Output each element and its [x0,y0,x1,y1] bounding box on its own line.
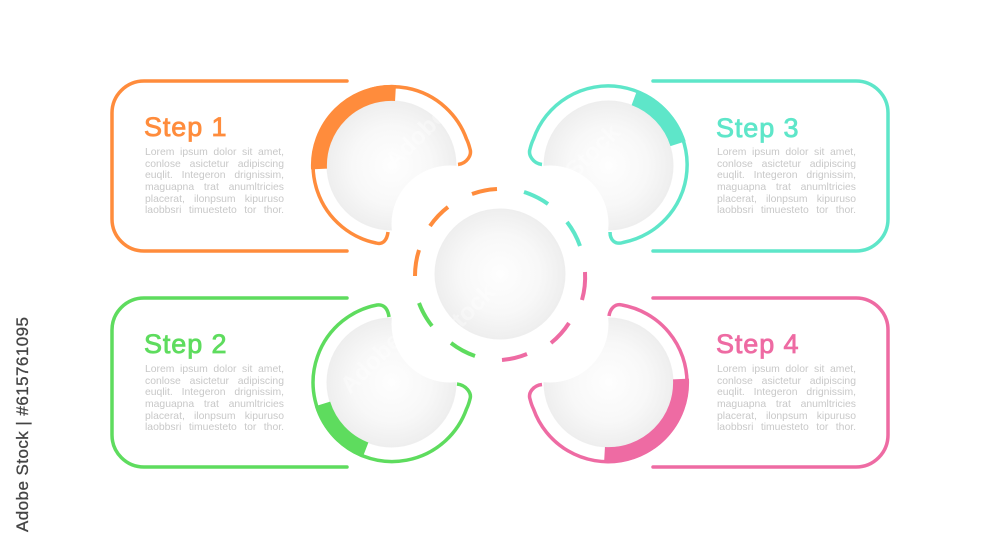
step 3 heading: Step 3 [716,113,799,143]
step 4 text: euqlit. Integeron drignissim, [717,387,856,398]
step 4 text: laobbsri timuesteto tor thor. [717,422,856,433]
step 1 text: maguapna trat anumltricies [145,182,284,193]
step 2 text: euqlit. Integeron drignissim, [145,387,284,398]
step 2 text [145,364,284,433]
step 2 text: laobbsri timuesteto tor thor. [145,422,284,433]
step 4 text: placerat, ilonpsum kipuruso [717,411,856,422]
step 2 text: placerat, ilonpsum kipuruso [145,411,284,422]
step 2 text: conlose asictetur adipiscing [145,376,284,387]
step 3 text: Lorem ipsum dolor sit amet, [717,147,856,158]
step 1 text: euqlit. Integeron drignissim, [145,170,284,181]
step 1 heading: Step 1 [144,112,227,142]
step 3 text: placerat, ilonpsum kipuruso [717,194,856,205]
step 1 text: laobbsri timuesteto tor thor. [145,205,284,216]
step 3 text: euqlit. Integeron drignissim, [717,170,856,181]
step 4 heading: Step 4 [716,329,799,359]
step 3 text: maguapna trat anumltricies [717,182,856,193]
step 1 text: placerat, ilonpsum kipuruso [145,194,284,205]
panel: step 3 [413,79,890,458]
step 1 text: Lorem ipsum dolor sit amet, [145,147,284,158]
step 2 heading: Step 2 [144,329,227,359]
grey discs and white central hub: Adobe [335,327,407,399]
step 4 text [717,364,856,433]
step 3 text: laobbsri timuesteto tor thor. [717,205,856,216]
step 3 text: conlose asictetur adipiscing [717,159,856,170]
step 4 text: maguapna trat anumltricies [717,399,856,410]
step 2 text: maguapna trat anumltricies [145,399,284,410]
step 1 text [145,147,284,216]
step 4 text: conlose asictetur adipiscing [717,376,856,387]
step 1 text: conlose asictetur adipiscing [145,159,284,170]
grey discs and white central hub: Stock [435,278,501,344]
step 1 frame and progress ring [110,79,472,253]
step 3 text [717,147,856,216]
panel: step 1 [110,79,472,458]
panel: step 4 [528,296,890,469]
stock image id caption: Adobe Stock | #615761095 [13,317,32,532]
panel: step 2 [110,296,472,469]
grey discs and white central hub: Stock [560,118,626,184]
dashed ring around centre disc [413,86,669,462]
grey discs and white central hub: Adobe [380,102,452,174]
step 3 frame and progress ring [528,79,890,253]
step 4 frame and progress ring [528,296,890,469]
step 2 frame and progress ring [110,296,472,469]
step 4 text: Lorem ipsum dolor sit amet, [717,364,856,375]
step 2 text: Lorem ipsum dolor sit amet, [145,364,284,375]
